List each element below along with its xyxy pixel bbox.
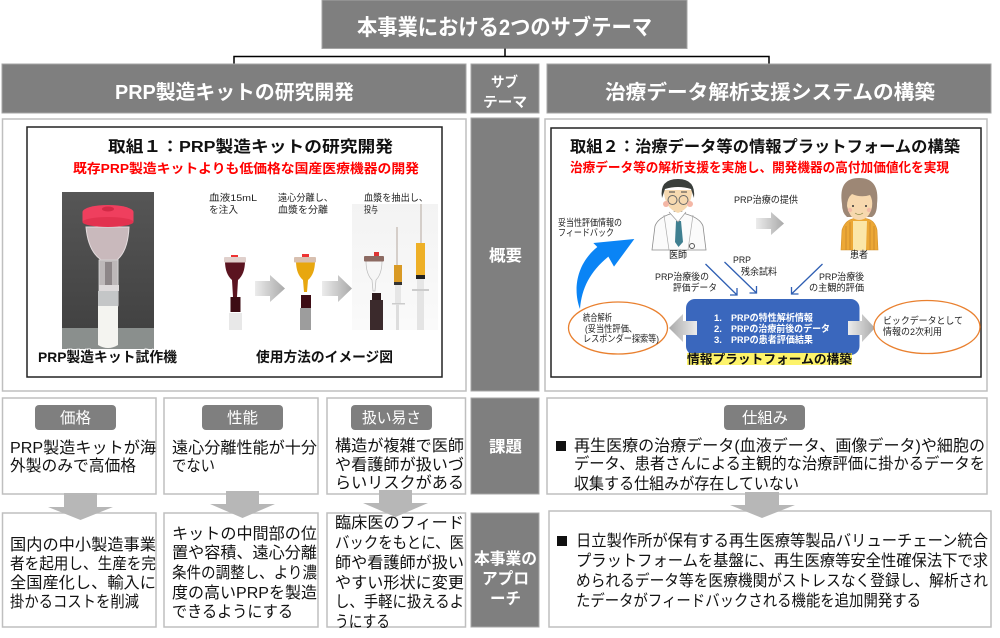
text: 掛かるコストを削減 (10, 593, 139, 611)
heading: PRP kit (2, 64, 466, 113)
callout: integrated analysis: 統合解析 (583, 312, 612, 324)
panel: mechanism issue (547, 398, 987, 494)
arrow: evaluation data (706, 264, 737, 295)
text (335, 437, 464, 492)
text: 日立製作所が保有する再生医療等製品バリューチェーン統合 (576, 532, 988, 550)
heading: data analysis system: 治療データ解析支援システムの構築 (605, 80, 935, 104)
step 1 label: を注入 (209, 204, 238, 216)
panel: approach performance (164, 513, 318, 627)
arrow: price issue to approach (48, 493, 113, 520)
text: キットの中間部の位 (172, 525, 317, 543)
text: うにする (335, 613, 390, 631)
text: 国内の中小製造事業 (10, 536, 156, 554)
step 1 label (209, 192, 257, 216)
callout: secondary use: ビックデータとして (883, 315, 963, 327)
panel: handling issue (327, 398, 466, 494)
text (574, 436, 985, 493)
text: 者を起用し、生産を完 (10, 555, 156, 573)
syringes (392, 204, 429, 330)
platform list: 1. (714, 313, 722, 324)
heading: sub-theme label: サブ (491, 74, 518, 90)
panel: approach handling (327, 513, 466, 631)
arrow: handling issue to approach (363, 490, 428, 517)
step 2 label (278, 192, 333, 216)
step 3 background photo (352, 204, 438, 330)
arrow: mechanism issue to approach (730, 492, 795, 518)
row label: approach (471, 513, 539, 627)
heading: sub-theme label: テーマ (483, 94, 527, 110)
label: post-therapy subjective evaluation: PRP治療後 (819, 271, 864, 283)
heading: sub-theme label (471, 64, 539, 113)
initiative 1 subheading: 既存PRP製造キットよりも低価格な国産医療機器の開発 (73, 161, 419, 176)
initiative 2 subheading: 治療データ等の解析支援を実施し、開発機器の高付加価値化を実現 (570, 160, 949, 175)
callout: integrated analysis: レスポンダー探索等) (583, 333, 659, 345)
heading: data analysis system (547, 64, 991, 113)
connector: title to sub-themes (234, 48, 769, 64)
text (335, 514, 464, 631)
step 3 label: 血漿を抽出し、 (364, 192, 428, 204)
chip: price (35, 405, 116, 430)
row label: overview: 概要 (489, 247, 522, 265)
platform list: 2. (714, 324, 722, 335)
panel: approach mechanism (549, 511, 991, 627)
label: PRP therapy: PRP治療の提供 (734, 194, 798, 206)
heading: PRP kit: PRP製造キットの研究開発 (115, 81, 354, 104)
feedback label: 妥当性評価情報の (558, 217, 622, 229)
text: PRP製造キットが海 (10, 439, 156, 457)
row label: approach: アプロ (482, 570, 529, 588)
arrow: platform to analysis (669, 314, 697, 342)
arrow: provide PRP therapy (734, 194, 798, 235)
text: し、手軽に扱えるよ (335, 593, 464, 611)
text: 師や看護師が扱い (335, 554, 464, 572)
label: PRP residual sample: PRP (733, 255, 751, 266)
arrow: step 2 to 3 (322, 275, 352, 302)
panel: initiative 1 (2, 119, 466, 391)
tube: after centrifuge (294, 254, 316, 330)
platform list: PRPの患者評価結果 (731, 334, 813, 346)
photo caption: PRP製造キット試作機 (38, 349, 177, 365)
step 1 label: 血液15mL (209, 192, 257, 204)
text: たデータがフィードバックされる機能を追加開発する (576, 591, 921, 610)
label: post-therapy evaluation data: PRP治療後の (655, 271, 709, 283)
chip: performance (202, 405, 283, 430)
chip: price: 価格 (60, 409, 91, 427)
text: 臨床医のフィード (335, 514, 464, 532)
label: post-therapy subjective evaluation (809, 271, 864, 294)
title (322, 0, 687, 48)
text (172, 525, 317, 621)
arrow: feedback curved (577, 239, 634, 309)
text: やすい形状に変更 (335, 574, 464, 592)
panel: approach price (2, 513, 156, 627)
tube: blood injected (224, 255, 246, 330)
callout: secondary use: 情報の2次利用 (883, 326, 942, 338)
text: データ、患者さんによる主観的な治療評価に掛かるデータを (574, 454, 985, 473)
callout: integrated analysis: (妥当性評価、 (585, 323, 637, 335)
arrow: residual sample (724, 262, 756, 293)
platform list: PRPの治療前後のデータ (731, 323, 830, 335)
text: バックをもとに、医 (335, 534, 464, 552)
panel: initiative 2 (545, 119, 987, 391)
text: 条件の調整し、より濃 (172, 564, 317, 582)
row label: issues (471, 398, 539, 494)
arrow: platform to secondary use (848, 314, 875, 342)
chip: mechanism: 仕組み (742, 409, 788, 427)
text: 遠心分離性能が十分 (172, 439, 317, 457)
step 2 label: 血漿を分離 (278, 204, 329, 216)
label: post-therapy evaluation data (655, 271, 717, 294)
text: 再生医療の治療データ(血液データ、画像データ)や細胞の (574, 436, 985, 455)
photo: PRP kit prototype (62, 192, 154, 349)
platform list (714, 312, 830, 346)
arrow: step 1 to 2 (255, 275, 285, 302)
label: post-therapy subjective evaluation: の主観的評価 (809, 282, 864, 294)
chip: performance: 性能 (227, 409, 258, 427)
usage figure (209, 192, 438, 330)
bullet (557, 536, 567, 546)
text (172, 439, 317, 475)
callout: secondary use (874, 300, 980, 354)
icon: doctor (652, 179, 706, 250)
platform list: PRPの特性解析情報 (731, 312, 813, 324)
label: PRP residual sample: 残余試料 (741, 266, 777, 278)
text: や看護師が扱いづ (335, 456, 464, 474)
panel: performance issue (164, 398, 318, 494)
text (10, 439, 156, 475)
text: でない (172, 457, 215, 475)
platform list: 3. (714, 335, 722, 346)
feedback label (558, 217, 622, 239)
step 3 label: 投与 (364, 204, 378, 216)
step 2 label: 遠心分離し、 (278, 192, 333, 204)
feedback label: フィードバック (558, 228, 614, 239)
text (10, 536, 156, 611)
usage figure caption: 使用方法のイメージ図 (256, 349, 393, 365)
arrow: subjective evaluation (792, 264, 822, 294)
arrow: performance issue to approach (210, 491, 275, 518)
text: 置や容積、遠心分離 (172, 544, 317, 562)
title: 本事業における2つのサブテーマ (357, 15, 652, 40)
text (576, 532, 988, 610)
row label: overview (471, 118, 539, 391)
chip: mechanism (724, 405, 805, 430)
row label: approach: 本事業の (474, 549, 537, 568)
initiative 2 heading: 取組２：治療データ等の情報プラットフォームの構築 (570, 137, 960, 156)
chip: ease of handling: 扱い易さ (362, 409, 421, 427)
text: 外製のみで高価格 (10, 457, 136, 475)
patient label: 患者 (850, 249, 868, 261)
text: 度の高いPRPを製造 (172, 584, 317, 602)
label: PRP residual sample (733, 255, 777, 278)
row label: approach: ーチ (490, 590, 521, 608)
label: post-therapy evaluation data: 評価データ (673, 282, 717, 294)
text: できるようにする (172, 603, 293, 621)
tube: plasma extracted (364, 252, 384, 330)
doctor label: 医師 (669, 249, 687, 261)
bullet (556, 441, 566, 451)
callout: integrated analysis (568, 302, 668, 354)
step 3 label (364, 192, 428, 216)
text: 構造が複雑で医師 (335, 437, 464, 455)
text: 全国産化し、輸入に (10, 574, 156, 592)
icon: patient (841, 178, 878, 250)
information platform block (686, 299, 860, 355)
initiative 1 heading: 取組１：PRP製造キットの研究開発 (108, 137, 393, 156)
row label: issues: 課題 (489, 438, 522, 456)
text: 収集する仕組みが存在していない (574, 475, 799, 493)
text: プラットフォームを基盤に、再生医療等安全性確保法下で求 (576, 552, 988, 570)
platform caption: 情報プラットフォームの構築 (687, 352, 852, 366)
text: らいリスクがある (335, 474, 464, 492)
panel: price issue (2, 398, 156, 494)
